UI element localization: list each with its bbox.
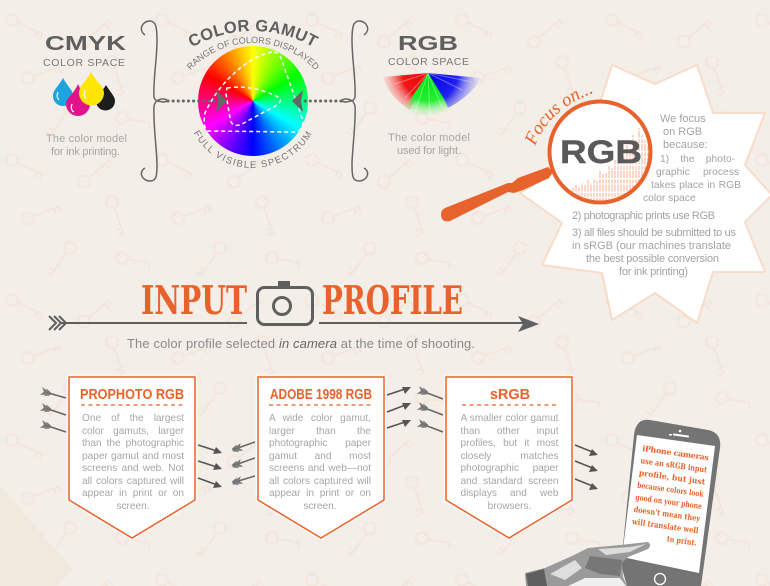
label: focus on: Focus on... xyxy=(524,91,592,146)
body text: displays and web xyxy=(460,488,558,499)
body text xyxy=(269,413,371,517)
heading: sRGB xyxy=(490,387,530,403)
starburst xyxy=(520,65,770,323)
body text: photographic paper xyxy=(460,463,558,474)
arrows: out of sRGB xyxy=(575,445,598,490)
icon: ink drops xyxy=(53,72,115,116)
arrows: into adobe xyxy=(231,442,255,487)
heading: PROPHOTO RGB xyxy=(80,387,184,403)
arrow: header xyxy=(49,316,539,332)
gamut outlines xyxy=(204,52,303,132)
text: why RGB intro: because: xyxy=(663,139,708,151)
body text: screen. xyxy=(116,501,150,512)
arrows: out of adobe xyxy=(387,387,411,428)
text: why RGB intro xyxy=(660,113,708,151)
panel: focus on RGB starburst xyxy=(441,64,770,324)
body text: than the photographic xyxy=(82,438,184,449)
text: reasons two and three: 2) photographic prints use RGB xyxy=(572,210,715,222)
card: Adobe 1998 RGB xyxy=(258,377,384,538)
icon: pointing hand xyxy=(525,542,650,586)
text: reasons two and three: in sRGB (our machines translate xyxy=(572,240,731,252)
text: why RGB intro: on RGB xyxy=(663,126,702,138)
body text: all colors captured will xyxy=(82,476,184,487)
title: profile: PROFILE xyxy=(322,278,463,324)
text: reason one: color space xyxy=(643,193,696,204)
body text xyxy=(82,413,184,517)
brace: right xyxy=(342,21,368,181)
panel: RGB color space xyxy=(383,33,481,157)
body text: color gamuts, larger xyxy=(82,426,184,437)
arrows: out of prophoto xyxy=(198,445,222,488)
phone text: profile, but just xyxy=(638,467,706,487)
phone text: use an sRGB input xyxy=(640,455,708,475)
body text: larger than the xyxy=(269,426,371,437)
body text: screen. xyxy=(303,501,337,512)
phone text: because colors look xyxy=(637,480,705,499)
body text: A wide color gamut, xyxy=(269,413,371,424)
text: reasons two and three: 3) all files should be submitted to us xyxy=(572,227,736,239)
text: reason one: graphic process xyxy=(656,167,739,178)
title: color gamut: COLOR GAMUT xyxy=(188,20,319,46)
text: reasons two and three xyxy=(572,210,736,278)
phone text xyxy=(629,443,710,548)
text: reason one: takes place in RGB xyxy=(651,180,741,191)
text: ink printing xyxy=(46,133,127,158)
phone illustration xyxy=(525,420,720,586)
subheading: color space: COLOR SPACE xyxy=(388,56,469,68)
heading: ADOBE 1998 RGB xyxy=(270,387,372,403)
arrow: left dotted xyxy=(168,90,227,112)
body text: gamut and most xyxy=(269,451,371,462)
body text: browsers. xyxy=(488,501,531,512)
body text xyxy=(460,413,558,517)
body text: photographic paper xyxy=(269,438,371,449)
text: light xyxy=(388,132,470,157)
body text: appear in print or on xyxy=(82,488,184,499)
icon: camera xyxy=(258,281,312,324)
color wheel xyxy=(198,46,308,156)
text: RGB in lens: RGB xyxy=(560,134,642,170)
brace: left xyxy=(141,21,167,181)
phone text: iPhone cameras xyxy=(642,443,710,462)
arrows: into sRGB xyxy=(417,386,443,432)
caption: full visible spectrum: FULL VISIBLE SPECTRUM xyxy=(194,130,312,168)
text: ink printing: for ink printing. xyxy=(51,146,120,158)
text: reason one xyxy=(640,153,750,207)
phone body xyxy=(621,420,720,586)
text: reasons two and three: for ink printing) xyxy=(619,266,688,278)
card: sRGB xyxy=(446,377,572,538)
subheading: color space: COLOR SPACE xyxy=(43,57,125,69)
phone text: will translate well xyxy=(631,516,699,535)
text: why RGB intro: We focus xyxy=(660,113,706,125)
panel: color gamut wheel xyxy=(166,20,342,168)
arrows: into prophoto xyxy=(40,387,66,432)
panel: input profile header xyxy=(49,278,539,351)
phone screen xyxy=(622,435,715,573)
body text: appear in print or on xyxy=(269,488,371,499)
body text: screens and web. Not xyxy=(82,463,184,474)
arrow: right dotted xyxy=(292,90,341,112)
text: light: used for light. xyxy=(397,145,461,157)
phone home button xyxy=(654,574,666,584)
phone text: to print. xyxy=(666,533,698,548)
card: ProPhoto RGB xyxy=(69,377,195,538)
text: ink printing: The color model xyxy=(46,133,127,145)
text: light: The color model xyxy=(388,132,470,144)
heading: CMYK: CMYK xyxy=(45,33,127,55)
title: input: INPUT xyxy=(141,278,247,324)
heading: RGB: RGB xyxy=(398,33,458,55)
body text: A smaller color gamut xyxy=(460,413,558,424)
icon: light beams xyxy=(383,73,481,115)
body text: all colors captured will xyxy=(269,476,371,487)
body text: closely matches xyxy=(460,451,558,462)
phone text: good on your phone xyxy=(635,492,703,511)
panel: CMYK color space xyxy=(43,33,127,158)
body text: and standard screen xyxy=(460,476,558,487)
body text: screens and web—not xyxy=(269,463,371,474)
subtitle: The color profile selected in camera at the time of shooting. xyxy=(127,336,475,351)
icon: magnifying glass xyxy=(441,102,650,221)
body text: profiles, but it most xyxy=(460,438,558,449)
body text: One of the largest xyxy=(82,413,184,424)
phone speaker xyxy=(669,430,689,438)
phone text: doesn't mean they xyxy=(633,504,701,523)
caption: range of colors: RANGE OF COLORS DISPLAYED xyxy=(186,36,318,70)
body text: than other input xyxy=(460,426,558,437)
text: reason one: 1) the photo- xyxy=(660,154,735,165)
text: reasons two and three: the best possible conversion xyxy=(586,253,719,265)
body text: paper gamut and most xyxy=(82,451,184,462)
